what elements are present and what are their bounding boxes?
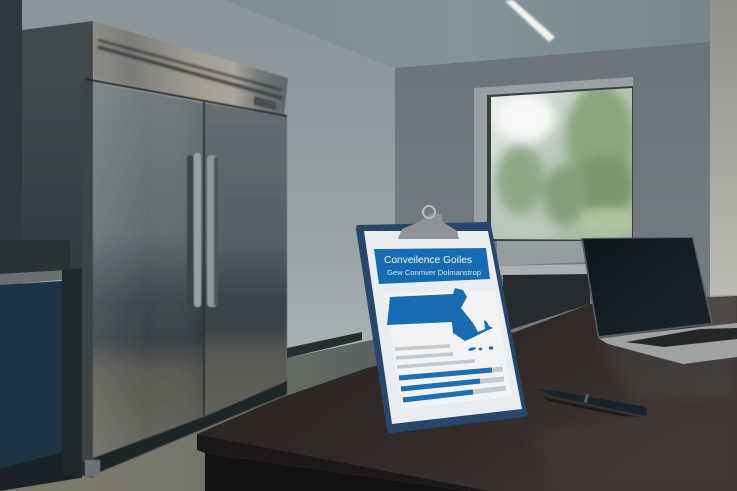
ceiling light [505,0,555,42]
refrigerator [82,21,288,477]
fridge right door [205,103,287,416]
banner subtitle: Gew Conmver Dolmanstrop [387,268,481,277]
bar chart [399,369,506,400]
fridge left door [83,81,203,462]
window [474,77,636,245]
laptop screen [581,237,713,339]
pen [538,389,647,417]
fridge top cap [93,21,288,116]
banner title: Conveilence Goiles [384,254,472,266]
map of Massachusetts [387,288,493,351]
grey text lines [395,346,475,367]
clipboard board [356,222,527,433]
fridge handles [187,153,218,307]
clip [398,206,459,239]
window sill and cabinet [497,241,590,332]
laptop [581,237,737,364]
paper [364,231,522,424]
left dark panel [0,0,93,491]
blue header banner [374,248,490,284]
fridge base [93,381,287,472]
clipboard [356,206,527,433]
laptop base [598,323,737,364]
table [197,296,737,491]
